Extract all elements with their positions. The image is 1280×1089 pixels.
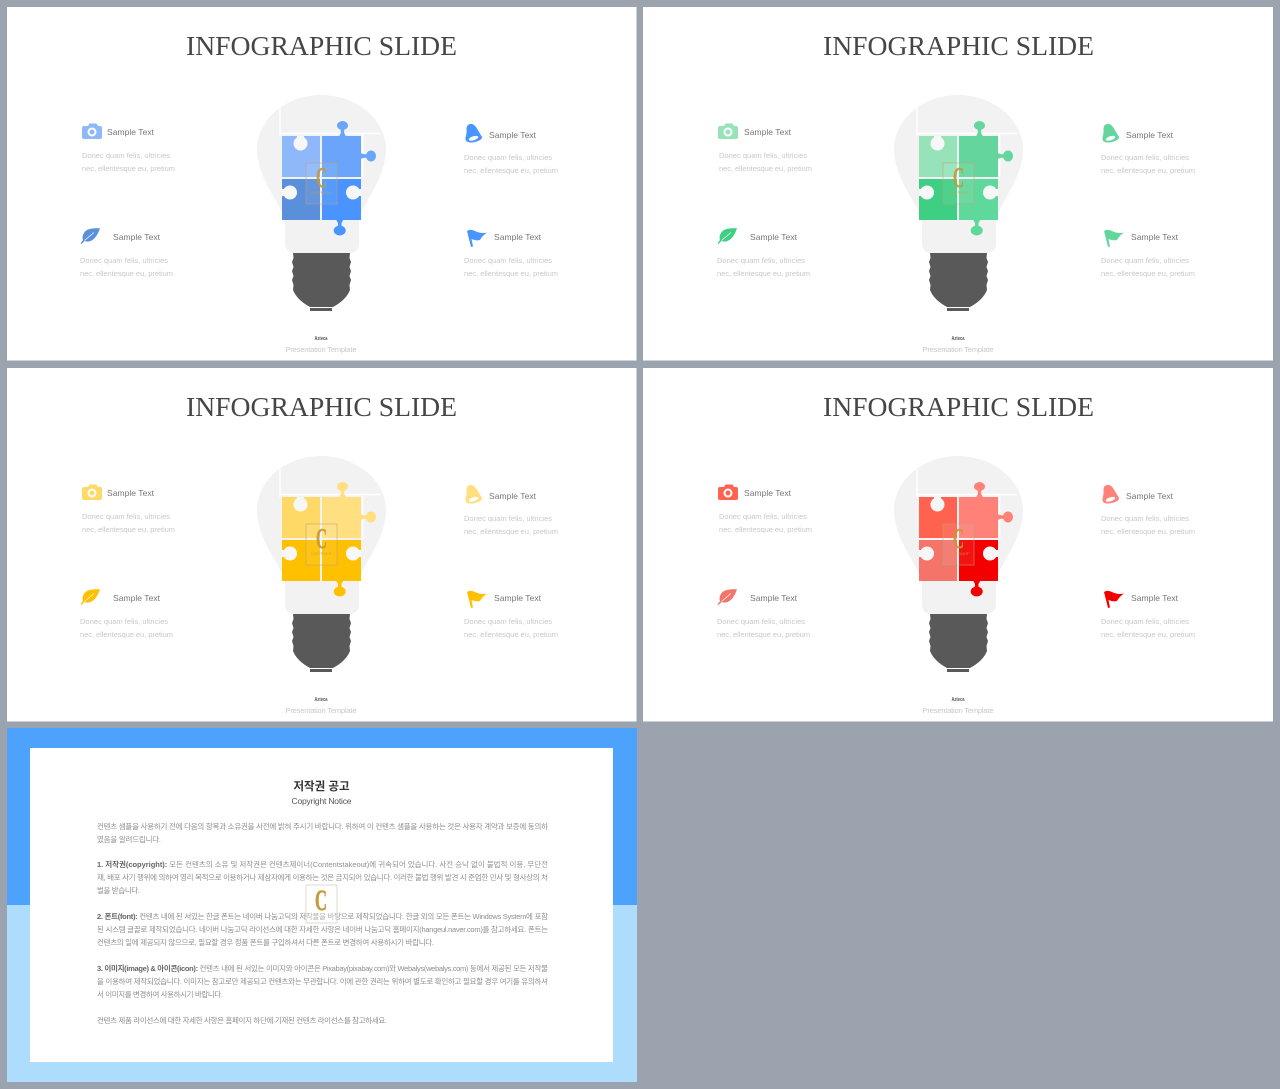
item: leaf: nec, ellentesque eu, pretium [80,630,173,639]
text block: copyright: 1. 저작권(copyright): 모든 컨텐츠의 소유 및 저작권은 컨텐츠제이너(Contentstakeout)에 귀속되어 있습니다. 사전 승낙 없이 불법적 이용, 무단전 [97,859,548,869]
item: flag: Sample Text [1131,232,1179,242]
item: flag [464,230,558,278]
footer: Presentation Template [922,706,994,715]
item: flag: nec, ellentesque eu, pretium [464,630,558,639]
item: bell [464,124,558,175]
item: flag: Donec quam felis, ultricies [464,256,552,265]
icon: leaf [718,228,737,244]
text block: copyright: 재, 배포 사기 행위에 의하여 영리 목적으로 이용하거나 제삼자에게 이용하는 것은 금지되어 있습니다. 이러한 불법 행위 발견 시 준엄한 민사 및 형사상의 처 [97,872,548,882]
item: bell: nec, ellentesque eu, pretium [464,527,558,536]
item: leaf: Donec quam felis, ultricies [717,256,805,265]
item: bell: nec, ellentesque eu, pretium [1101,527,1195,536]
item: bell: Donec quam felis, ultricies [1101,514,1189,523]
text block: image and icon: 을 이용하여 제작되었습니다. 이미지는 참고로만 제공되고 컨텐츠와는 무관합니다. 이에 관한 권리는 위하여 별도로 확인하고 필요할 경우 여기를 유의하셔 [97,976,548,986]
item: flag: Sample Text [494,593,542,603]
footer [922,697,994,715]
panel: red slide [643,368,1273,722]
watermark: COPYRIGHT [311,552,333,556]
item: flag: nec, ellentesque eu, pretium [464,269,558,278]
item: leaf: nec, ellentesque eu, pretium [717,269,810,278]
item: camera [718,124,812,173]
title: INFOGRAPHIC SLIDE [823,392,1094,422]
watermark: C [953,524,964,555]
text block: font: 컨텐츠의 일에 제공되지 않으므로, 필요할 경우 정품 폰트를 구입하셔서 다른 폰트로 변경하여 사용하시기 바랍니다. [97,937,434,947]
light bulb with puzzle [257,95,386,311]
item: bell: Sample Text [489,491,537,501]
item: leaf: Donec quam felis, ultricies [80,617,168,626]
text block: intro: 컨텐츠 샘플을 사용하기 전에 다음의 항목과 소유권을 사전에 밝혀 주시기 바랍니다. 위하여 이 컨텐츠 샘플을 사용하는 것은 사용자 계약과 보증에 동의하 [97,821,548,831]
item: camera: nec, ellentesque eu, pretium [82,525,175,534]
item: bell: Sample Text [489,130,537,140]
item: camera: Sample Text [107,488,155,498]
text block: font: 2. 폰트(font): 컨텐츠 내에 된 서있는 한글 폰트는 네이버 나눔고딕의 저작물을 바탕으로 제작되었습니다. 한글 외의 모든 폰트는 Windows System에 포함 [97,911,548,921]
text block: image and icon: 서 이미지를 변경하여 사용하시기 바랍니다. [97,989,223,999]
item: bell: nec, ellentesque eu, pretium [464,166,558,175]
item: leaf: Donec quam felis, ultricies [717,617,805,626]
item: flag: Donec quam felis, ultricies [464,617,552,626]
icon: flag [1104,230,1124,247]
footer: Azteca [952,697,965,703]
icon: bell [1102,124,1119,143]
icon: bell [1102,485,1119,504]
item: camera [82,124,175,173]
item: camera: Donec quam felis, ultricies [719,151,807,160]
icon: flag [467,591,487,608]
item: flag: Sample Text [1131,593,1179,603]
item: flag: Sample Text [494,232,542,242]
item: camera [82,484,175,534]
item: camera: Sample Text [744,488,792,498]
item: camera: nec, ellentesque eu, pretium [82,164,175,173]
item: flag [1101,591,1195,639]
icon: camera [718,484,738,500]
text block: font: 된 시스템 글꼴로 제작되었습니다. 네이버 나눔고딕 라이선스에 대한 자세한 사항은 네이버 나눔고딕 홈페이지(hangeul.naver.com)를 참고하세요. 폰트는 [97,924,548,934]
item: leaf [80,589,173,639]
item: flag: nec, ellentesque eu, pretium [1101,630,1195,639]
item: flag: Donec quam felis, ultricies [1101,617,1189,626]
item: camera: Donec quam felis, ultricies [719,512,807,521]
watermark: COPYRIGHT [948,191,970,195]
text block: intro [97,821,548,844]
item: leaf [717,228,810,278]
item: flag [464,591,558,639]
heading: copyright notice: 저작권 공고 [293,779,350,793]
item: camera: nec, ellentesque eu, pretium [719,525,812,534]
footer: Azteca [314,336,328,342]
item: bell: Donec quam felis, ultricies [464,514,552,523]
title: INFOGRAPHIC SLIDE [823,31,1094,61]
footer: Presentation Template [286,706,356,715]
footer [286,697,356,715]
item: leaf [80,228,173,278]
text block: image and icon [97,963,548,999]
item: leaf [717,589,810,639]
heading: copyright notice: Copyright Notice [292,796,352,806]
icon: leaf [80,589,100,605]
item: leaf: nec, ellentesque eu, pretium [717,630,810,639]
icon: bell [465,124,482,143]
watermark: COPYRIGHT [311,191,333,195]
panel: yellow slide [7,368,636,722]
item: bell [1101,485,1195,536]
footer: Presentation Template [922,345,994,354]
item: bell [1101,124,1195,175]
panel: green slide [643,7,1273,360]
footer: Presentation Template [286,345,356,354]
watermark: C [315,884,327,917]
panel: blue slide [7,7,636,360]
item: leaf: Sample Text [750,593,798,603]
light bulb with puzzle [894,95,1023,311]
watermark: C [316,163,327,194]
item: leaf: Sample Text [750,232,798,242]
icon: flag [467,230,487,247]
item: leaf: Donec quam felis, ultricies [80,256,168,265]
icon: leaf [80,228,100,244]
icon: camera [718,124,738,139]
text block: font [97,911,548,947]
light bulb with puzzle [894,456,1023,672]
watermark [943,524,974,565]
item: camera: Donec quam felis, ultricies [82,151,170,160]
watermark [306,163,337,204]
text block: copyright [97,859,548,895]
footer [922,336,994,354]
watermark [943,163,974,204]
footer: Azteca [314,697,328,703]
watermark [306,524,337,565]
watermark: C [316,524,327,555]
watermark: COPYRIGHT [948,552,970,556]
title: INFOGRAPHIC SLIDE [186,392,457,422]
item: camera: Sample Text [107,127,155,137]
text block: license note: 컨텐츠 제품 라이선스에 대한 자세한 사항은 홈페이지 하단에 기재된 컨텐츠 라이선스를 참고하세요. [97,1015,387,1025]
item: camera: Sample Text [744,127,792,137]
watermark [306,884,337,923]
item: bell [464,485,558,536]
heading: copyright notice [292,779,352,806]
watermark: C [953,163,964,194]
icon: leaf [718,589,737,605]
item: flag: nec, ellentesque eu, pretium [1101,269,1195,278]
item: leaf: Sample Text [113,593,161,603]
light bulb with puzzle [257,456,386,672]
item: flag: Donec quam felis, ultricies [1101,256,1189,265]
text block: copyright: 벌을 받습니다. [97,885,140,895]
item: leaf: Sample Text [113,232,161,242]
item: bell: Sample Text [1126,491,1174,501]
footer [286,336,356,354]
item: flag [1101,230,1195,278]
text block: intro: 였음을 알려드립니다. [97,834,161,844]
icon: flag [1104,591,1124,608]
icon: camera [82,484,102,500]
item: camera [718,484,812,534]
item: bell: Donec quam felis, ultricies [464,153,552,162]
text block: image and icon: 3. 이미지(image) & 아이콘(icon): 컨텐츠 내에 된 서있는 이미지와 아이콘은 Pixabay(pixabay.com)와 Webalys(webalys.com) 등에서 제공된 모든 저작물 [97,963,548,973]
footer: Azteca [952,336,965,342]
panel: copyright notice [7,728,637,1082]
item: bell: nec, ellentesque eu, pretium [1101,166,1195,175]
item: camera: nec, ellentesque eu, pretium [719,164,812,173]
icon: bell [465,485,482,504]
item: bell: Donec quam felis, ultricies [1101,153,1189,162]
item: camera: Donec quam felis, ultricies [82,512,170,521]
title: INFOGRAPHIC SLIDE [186,31,457,61]
item: bell: Sample Text [1126,130,1174,140]
item: leaf: nec, ellentesque eu, pretium [80,269,173,278]
icon: camera [82,124,102,139]
